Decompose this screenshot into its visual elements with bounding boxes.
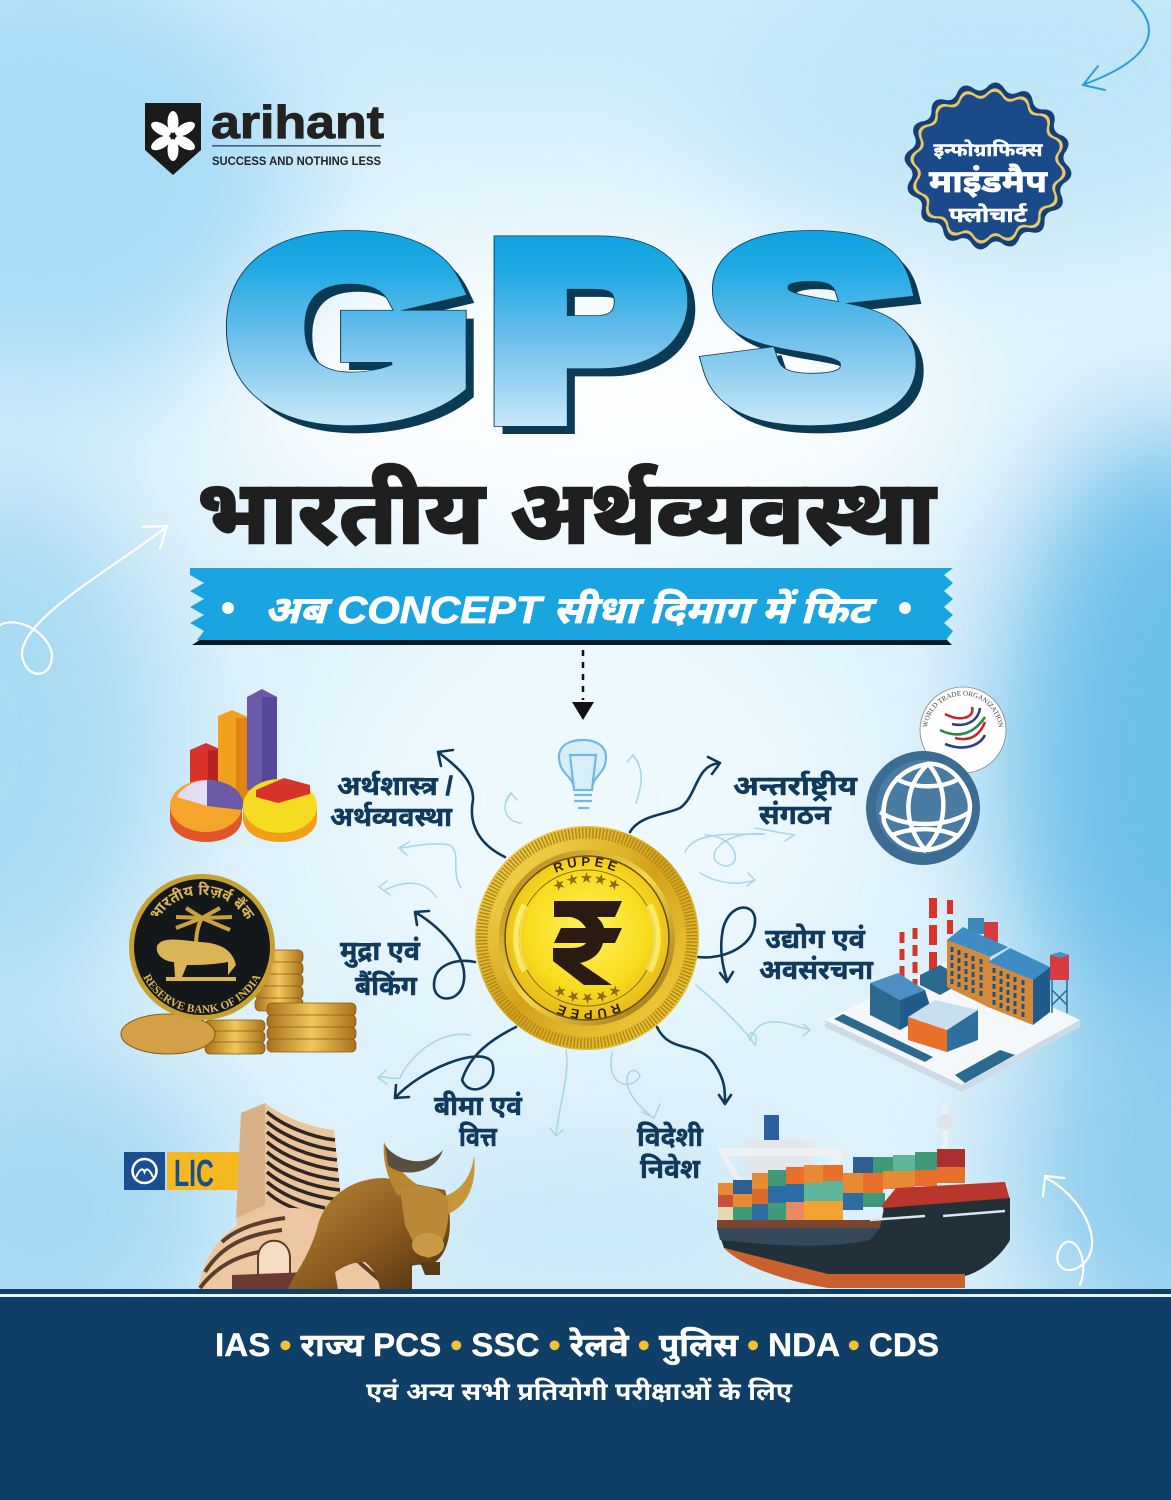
icon: Reserve Bank of India seal and gold coins: RESERVE BANK OF INDIA [143, 973, 261, 1014]
icon: WTO seal: WORLD TRADE ORGANIZATION [922, 690, 1004, 727]
badge: infographics mindmap flowchart: फ्लोचार्ट [949, 203, 1028, 227]
label: currency and banking: बैंकिंग [355, 970, 418, 1001]
label: insurance and finance [434, 1091, 523, 1152]
label: industry and infrastructure: उद्योग एवं [765, 924, 866, 954]
label: foreign investment: निवेश [640, 1153, 700, 1184]
decorative arrow: bottom right [1043, 1176, 1092, 1285]
title: GPS: P [499, 206, 689, 472]
title: GPS: S [711, 195, 911, 461]
title: GPS [231, 195, 919, 472]
title: GPS: G [239, 203, 476, 468]
label: industry and infrastructure: अवसंरचना [759, 955, 874, 985]
icon: container ship [717, 1105, 1010, 1288]
decorative arrow: left [0, 526, 167, 674]
label: insurance and finance: बीमा एवं [434, 1091, 523, 1121]
label: industry and infrastructure [759, 924, 874, 985]
footer band: एवं अन्य सभी प्रतियोगी परीक्षाओं के लिए [366, 1377, 793, 1406]
label: currency and banking: मुद्रा एवं [340, 936, 421, 967]
icon: stock exchange building [198, 1103, 382, 1290]
footer band: IAS • राज्य PCS • SSC • रेलवे • पुलिस • NDA • CDS [215, 1327, 939, 1365]
logo: arihant: SUCCESS AND NOTHING LESS [212, 154, 381, 168]
label: currency and banking [340, 936, 421, 1001]
dashed arrow [572, 650, 594, 720]
label: international organisation: अन्तर्राष्ट्रीय [733, 770, 858, 802]
ribbon banner [190, 568, 953, 645]
rupee coin [475, 826, 699, 1050]
icon: 3D chart [170, 689, 317, 842]
chimneys [902, 898, 950, 990]
label: international organisation: संगठन [759, 800, 832, 830]
rupee coin: RUPEE [556, 1003, 621, 1019]
label: foreign investment [637, 1121, 704, 1184]
badge: infographics mindmap flowchart: इन्फोग्राफिक्स [934, 140, 1043, 160]
label: economics: अर्थशास्त्र / [337, 770, 453, 801]
label: insurance and finance: वित्त [459, 1122, 498, 1152]
icon: bronze bull [288, 1142, 475, 1290]
icon: light bulb [559, 740, 606, 808]
ribbon banner: अब CONCEPT सीधा दिमाग में फिट [264, 588, 877, 632]
icon: Reserve Bank of India seal and gold coins: भारतीय रिज़र्व बैंक [150, 882, 255, 919]
logo: arihant: arihant [211, 96, 384, 148]
title: GPS: P [491, 198, 681, 464]
label: international organisation [733, 770, 858, 830]
rupee coin: ★★★★★ [554, 985, 620, 1004]
light decorative arrows [378, 755, 810, 1136]
label: economics: अर्थव्यवस्था [330, 801, 453, 832]
title: GPS: G [231, 195, 468, 460]
rupee coin: RUPEE [553, 857, 618, 873]
title: GPS: S [711, 195, 911, 461]
logo: arihant [145, 96, 384, 175]
badge: infographics mindmap flowchart: माइंडमैप [929, 164, 1048, 199]
title: GPS: G [231, 195, 468, 460]
badge: infographics mindmap flowchart [905, 83, 1071, 249]
title: Indian economy: भारतीय अर्थव्यवस्था [197, 463, 937, 562]
footer band [0, 1289, 1171, 1500]
icon: LIC logo [124, 1152, 239, 1194]
icon: globe [866, 751, 980, 865]
decorative arrow: top right [1083, 0, 1149, 90]
title: GPS: P [491, 198, 681, 464]
icon: Reserve Bank of India seal and gold coins [120, 874, 356, 1054]
icon: industrial complex [825, 898, 1080, 1092]
icon: LIC logo: LIC [174, 1152, 214, 1194]
label: foreign investment: विदेशी [637, 1121, 704, 1152]
rupee coin: ★★★★★ [554, 872, 620, 891]
title: GPS: S [719, 203, 919, 469]
label: economics [330, 770, 453, 832]
dark curved arrows [395, 750, 755, 1104]
icon: WTO seal [920, 686, 1006, 774]
